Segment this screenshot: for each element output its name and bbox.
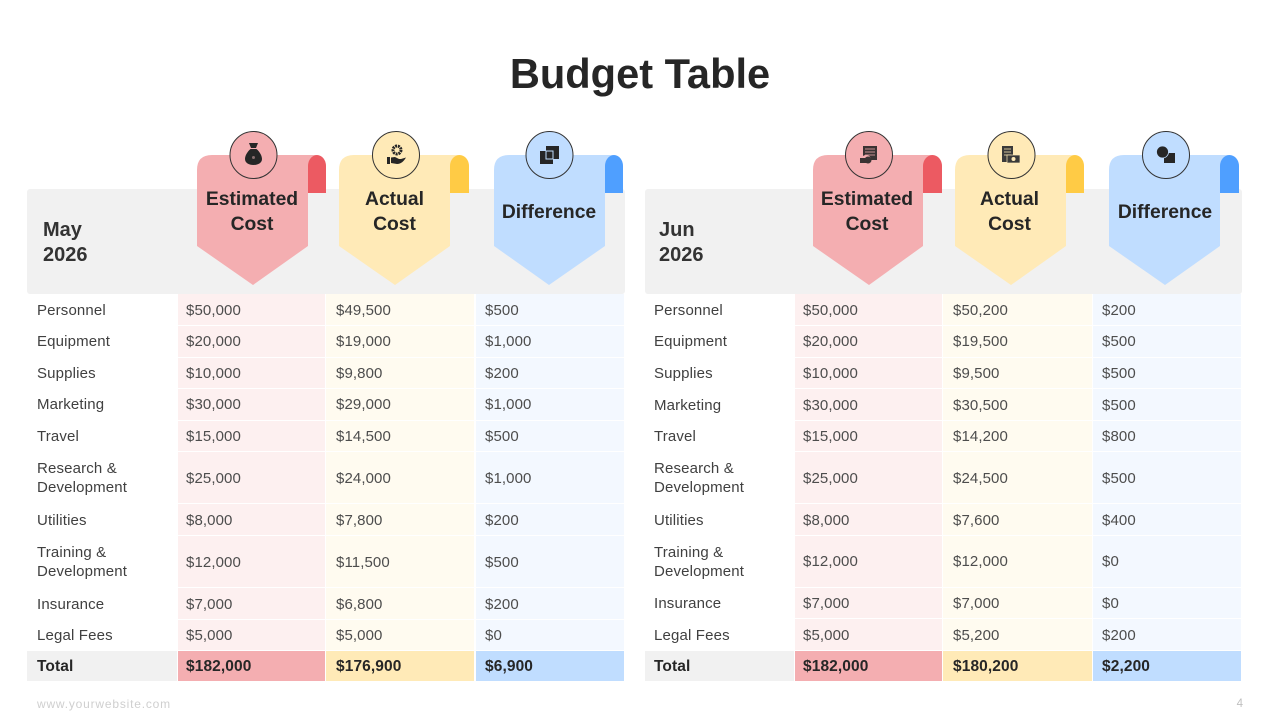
row: Legal Fees	[27, 620, 624, 650]
column header: Actual Cost: Actual	[365, 189, 424, 210]
row: Training & Development	[27, 536, 624, 587]
row: Marketing	[27, 389, 624, 420]
row: Travel: $15,000	[186, 428, 241, 445]
column header: Difference: Difference	[502, 202, 596, 223]
row: Research & Development	[27, 452, 624, 503]
row: Total: $176,900	[336, 658, 401, 675]
column header: Difference	[494, 132, 623, 285]
column header: Estimated Cost	[197, 132, 326, 285]
row: Total: $6,900	[485, 658, 533, 675]
row: Insurance	[27, 588, 624, 619]
row: Supplies: $10,000	[186, 365, 241, 382]
row: Equipment: $500	[1102, 333, 1136, 350]
row: Research & Development: $25,000	[186, 470, 241, 487]
row: Insurance: $200	[485, 596, 519, 613]
header band: Jun 2026: 2026	[659, 244, 704, 266]
column header: Estimated Cost	[813, 132, 942, 285]
footer: website: www.yourwebsite.com	[36, 697, 171, 711]
column header: Estimated Cost: Estimated	[821, 189, 913, 210]
row: Insurance: Insurance	[654, 595, 721, 612]
row: Insurance: $7,000	[186, 596, 232, 613]
row: Total: $2,200	[1102, 658, 1150, 675]
row: Training & Development	[645, 536, 1241, 587]
row: Travel: $15,000	[803, 428, 858, 445]
row: Insurance: $7,000	[803, 595, 849, 612]
row: Legal Fees	[645, 619, 1241, 650]
column header: Actual Cost	[955, 132, 1084, 285]
row: Personnel: $50,200	[953, 302, 1008, 319]
row: Research & Development: $24,000	[336, 470, 391, 487]
row: Marketing: Marketing	[37, 396, 104, 413]
column header: Actual Cost: Cost	[373, 214, 416, 235]
row: Marketing: $30,000	[803, 397, 858, 414]
row: Marketing: $29,000	[336, 396, 391, 413]
row: Total	[27, 651, 624, 681]
row: Utilities: $8,000	[186, 512, 232, 529]
row: Supplies: Supplies	[654, 365, 713, 382]
row: Insurance: $6,800	[336, 596, 382, 613]
panel: Jun 2026 table	[645, 132, 1242, 681]
row: Research & Development	[645, 452, 1241, 503]
row: Supplies: Supplies	[37, 365, 96, 382]
row: Total: $182,000	[186, 658, 251, 675]
title: Budget Table	[510, 50, 770, 97]
row: Marketing: $30,500	[953, 397, 1008, 414]
row: Utilities: $8,000	[803, 512, 849, 529]
row: Supplies	[27, 358, 624, 388]
row: Equipment: $19,500	[953, 333, 1008, 350]
row: Training & Development: $11,500	[336, 554, 390, 571]
row: Research & Development: $1,000	[485, 470, 531, 487]
row: Personnel: $49,500	[336, 302, 391, 319]
header band: May 2026: 2026	[43, 244, 88, 266]
header band: Jun 2026	[645, 189, 1242, 294]
row: Total	[645, 651, 1241, 681]
row: Insurance	[645, 588, 1241, 618]
row: Training & Development: Development	[654, 563, 745, 580]
row: Personnel: $200	[1102, 302, 1136, 319]
row: Legal Fees: $0	[485, 627, 502, 644]
row: Travel: $500	[485, 428, 519, 445]
row: Training & Development: $12,000	[186, 554, 241, 571]
row: Supplies: $200	[485, 365, 519, 382]
row: Insurance: Insurance	[37, 596, 104, 613]
row: Insurance: $0	[1102, 595, 1119, 612]
column header: Estimated Cost: Cost	[231, 214, 274, 235]
row: Marketing: $30,000	[186, 396, 241, 413]
row: Training & Development: Training &	[654, 544, 723, 561]
column header: Estimated Cost: Cost	[846, 214, 889, 235]
row: Supplies: $9,800	[336, 365, 382, 382]
row: Research & Development: $500	[1102, 470, 1136, 487]
row: Personnel: Personnel	[37, 302, 106, 319]
row: Utilities	[645, 504, 1241, 535]
row: Equipment: $20,000	[803, 333, 858, 350]
row: Supplies: $500	[1102, 365, 1136, 382]
row: Travel: $14,200	[953, 428, 1008, 445]
row: Personnel: $50,000	[186, 302, 241, 319]
row: Training & Development: Training &	[37, 544, 106, 561]
row: Personnel: $500	[485, 302, 519, 319]
row: Insurance: $7,000	[953, 595, 999, 612]
row: Utilities: $200	[485, 512, 519, 529]
row: Training & Development: $12,000	[953, 553, 1008, 570]
row: Personnel	[645, 294, 1241, 325]
panel: May 2026 table	[27, 132, 625, 681]
row: Equipment: $20,000	[186, 333, 241, 350]
row: Travel	[645, 421, 1241, 451]
row: Supplies	[645, 358, 1241, 388]
row: Equipment	[27, 326, 624, 357]
row: Research & Development: Research &	[654, 460, 734, 477]
row: Research & Development: $25,000	[803, 470, 858, 487]
header band: May 2026	[27, 189, 625, 294]
row: Training & Development: $0	[1102, 553, 1119, 570]
row: Research & Development: $24,500	[953, 470, 1008, 487]
row: Legal Fees: $5,000	[336, 627, 382, 644]
row: Legal Fees: $5,000	[186, 627, 232, 644]
row: Personnel: Personnel	[654, 302, 723, 319]
row: Legal Fees: $200	[1102, 627, 1136, 644]
row: Training & Development: $500	[485, 554, 519, 571]
column header: Actual Cost: Actual	[980, 189, 1039, 210]
row: Equipment	[645, 326, 1241, 357]
row: Equipment: $19,000	[336, 333, 391, 350]
row: Travel: $14,500	[336, 428, 391, 445]
row: Training & Development: $12,000	[803, 553, 858, 570]
row: Legal Fees: Legal Fees	[37, 627, 113, 644]
row: Research & Development: Development	[654, 479, 745, 496]
header band: Jun 2026: Jun	[659, 219, 695, 241]
row: Total: Total	[654, 658, 690, 675]
row: Supplies: $9,500	[953, 365, 999, 382]
row: Training & Development: Development	[37, 563, 128, 580]
column header: Estimated Cost: Estimated	[206, 189, 298, 210]
column header: Actual Cost: Cost	[988, 214, 1031, 235]
row: Utilities: Utilities	[654, 512, 704, 529]
row: Legal Fees: $5,000	[803, 627, 849, 644]
row: Marketing: $1,000	[485, 396, 531, 413]
row: Utilities: $400	[1102, 512, 1136, 529]
row: Marketing: Marketing	[654, 397, 721, 414]
row: Utilities: $7,800	[336, 512, 382, 529]
row: Supplies: $10,000	[803, 365, 858, 382]
row: Equipment: Equipment	[37, 333, 111, 350]
row: Travel: Travel	[654, 428, 696, 445]
row: Personnel: $50,000	[803, 302, 858, 319]
row: Personnel	[27, 294, 624, 325]
row: Equipment: Equipment	[654, 333, 728, 350]
row: Travel	[27, 421, 624, 451]
footer: page number: 4	[1237, 698, 1244, 710]
row: Research & Development: Research &	[37, 460, 117, 477]
row: Research & Development: Development	[37, 479, 128, 496]
row: Marketing	[645, 389, 1241, 420]
column header: Difference	[1109, 132, 1239, 285]
column header: Difference: Difference	[1118, 202, 1212, 223]
row: Marketing: $500	[1102, 397, 1136, 414]
column header: Actual Cost	[339, 132, 469, 285]
row: Total: Total	[37, 658, 73, 675]
row: Utilities: $7,600	[953, 512, 999, 529]
header band: May 2026: May	[43, 219, 83, 241]
row: Equipment: $1,000	[485, 333, 531, 350]
row: Utilities	[27, 504, 624, 535]
row: Legal Fees: $5,200	[953, 627, 999, 644]
row: Travel: Travel	[37, 428, 79, 445]
row: Travel: $800	[1102, 428, 1136, 445]
row: Utilities: Utilities	[37, 512, 87, 529]
row: Legal Fees: Legal Fees	[654, 627, 730, 644]
row: Total: $180,200	[953, 658, 1018, 675]
row: Total: $182,000	[803, 658, 868, 675]
